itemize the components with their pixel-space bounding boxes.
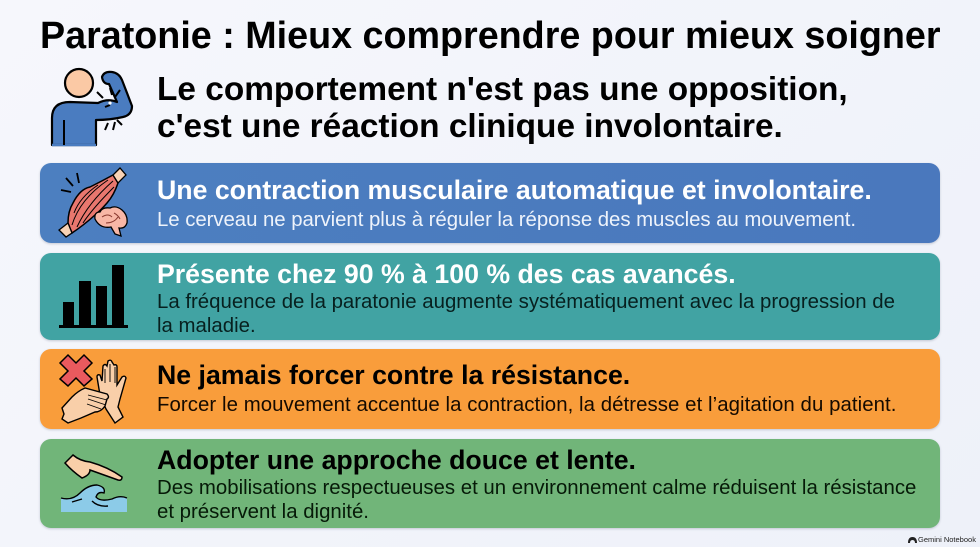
logo: Gemini Notebook: Gemini Notebook [918,535,976,544]
subtitle [157,71,848,145]
subtitle: Le comportement n'est pas une opposition, [157,71,848,108]
icon: muscle and brain [58,167,128,238]
body text [157,477,916,522]
icon: hand over water [60,454,128,512]
icon: cross and hands [59,354,127,424]
body text [157,291,895,337]
subtitle: c'est une réaction clinique involontaire. [157,108,783,145]
heading: Ne jamais forcer contre la résistance. [157,360,630,390]
heading: Une contraction musculaire automatique et involontaire. [157,175,872,205]
body text: Forcer le mouvement accentue la contraction, la détresse et l’agitation du patient. [157,394,896,416]
panel: prevalence [40,253,940,340]
body text: et préservent la dignité. [157,500,369,522]
icon: bar chart [59,265,128,328]
body text: la maladie. [157,315,256,337]
panel: gentle approach [40,439,940,528]
icon: person flexing arm [50,68,134,146]
panel: contraction [40,163,940,243]
body text: Le cerveau ne parvient plus à réguler la réponse des muscles au mouvement. [157,209,856,231]
body text: Des mobilisations respectueuses et un environnement calme réduisent la résistance [157,477,916,499]
heading: Adopter une approche douce et lente. [157,445,636,475]
heading: Présente chez 90 % à 100 % des cas avancés. [157,259,736,289]
body text: La fréquence de la paratonie augmente systématiquement avec la progression de [157,291,895,313]
title: Paratonie : Mieux comprendre pour mieux soigner [40,14,941,56]
panel: do not force [40,349,940,429]
